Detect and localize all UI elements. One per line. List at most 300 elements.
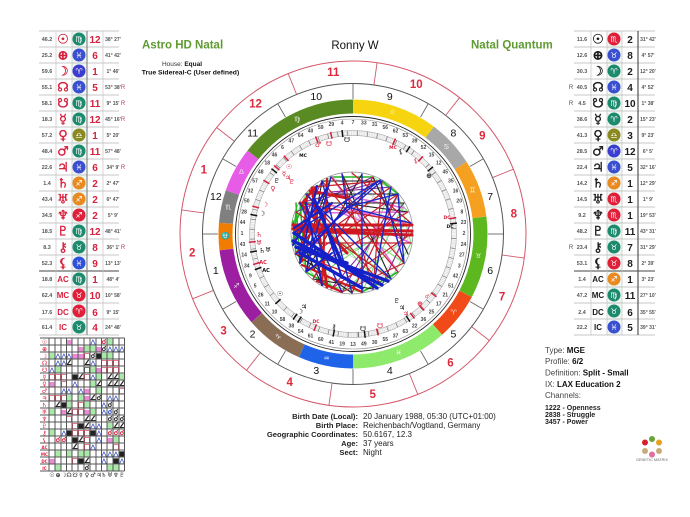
gate numbers: 24 — [461, 242, 466, 248]
aspect tints and marks: ■ — [96, 366, 102, 374]
red design activation ticks — [249, 132, 456, 335]
row: Earth: ♉ — [610, 51, 618, 60]
aspect tints and marks: △ — [49, 366, 55, 374]
quantum house numbers: 11 — [327, 67, 340, 79]
aspect tints and marks: ■■■ — [48, 351, 114, 360]
gate numbers: 63 — [403, 329, 408, 335]
aspect tints and marks: □□ — [72, 408, 84, 416]
gate numbers: 45 — [443, 169, 448, 175]
row: North Node — [42, 80, 126, 96]
row: Saturn — [43, 176, 119, 192]
aspect row labels: ⊕ — [42, 346, 47, 353]
text block: design summary: 2838 - Struggle — [545, 412, 595, 419]
gate numbers: 14 — [241, 253, 247, 259]
row: Uranus: 14.5 — [577, 197, 587, 203]
row: Mercury — [577, 112, 656, 128]
aspect tints and marks: □ — [84, 366, 90, 374]
row: Earth — [577, 48, 654, 64]
row: Pluto: 11 — [625, 227, 636, 238]
aspect tints and marks: ■■ — [54, 365, 97, 374]
planet activation labels: ☿ — [282, 170, 286, 178]
panel: aspect grid — [40, 337, 126, 479]
natal house numbers: 6 — [487, 265, 493, 277]
zodiac band glyphs: ♋ — [443, 143, 449, 151]
aspect column labels: ☉⊕☽☊☋☿♀♂♃♄♅♆♇ — [49, 472, 125, 479]
text block: birth details: Birth Date (Local): — [292, 412, 358, 421]
row: Mars: ♂ — [592, 144, 604, 160]
row: Mercury: 38.6 — [577, 117, 587, 123]
aspect row labels: ⚸ — [42, 437, 47, 444]
planet activation labels: ☋ — [344, 136, 350, 144]
aspect tints and marks: △△ — [55, 359, 67, 367]
natal house numbers: 4 — [387, 365, 393, 377]
aspect tints and marks: ☌☌ — [56, 436, 67, 444]
row: Earth: ♓ — [75, 51, 83, 60]
aspect tints and marks: △ — [96, 429, 102, 437]
row: Chiron: 23.4 — [577, 245, 587, 251]
gate numbers: 44 — [240, 220, 246, 226]
row: Venus: ♀ — [593, 128, 603, 144]
planet activation labels: ♂ — [315, 141, 321, 149]
row: Mars: ♈ — [610, 147, 618, 156]
heading: Natal Quantum: Natal Quantum — [471, 40, 553, 52]
row: Midheaven: 11 — [625, 291, 636, 302]
row: South Node: 4.5 — [578, 101, 586, 107]
row: Earth: 41° 42' — [105, 53, 121, 59]
row: Imum Coeli: IC — [594, 323, 602, 332]
row: Earth: 25.2 — [42, 53, 52, 59]
aspect row labels: ☿ — [43, 374, 46, 381]
row: Jupiter: 22.4 — [577, 165, 587, 171]
row: Sun — [577, 32, 656, 48]
aspect tints and marks: ☌ — [102, 338, 107, 346]
row: Jupiter: ♃ — [592, 160, 604, 176]
row: North Node: R — [569, 85, 574, 91]
row: Chiron — [569, 240, 656, 256]
aspect tints and marks: □ — [61, 380, 67, 388]
row: Saturn: 14.2 — [577, 181, 587, 187]
row: Midheaven — [42, 288, 121, 302]
gate numbers: 40 — [308, 128, 314, 134]
row: Lilith — [577, 256, 654, 272]
aspect tints and marks: ■ — [49, 457, 55, 465]
aspect tints and marks: △△△ — [107, 345, 125, 353]
planet activation labels: ♃ — [285, 174, 291, 182]
row: Chiron: 8 — [92, 243, 98, 254]
row: Mercury: 2 — [627, 115, 633, 126]
aspect row labels: ☽ — [42, 353, 47, 360]
gate numbers: 33 — [361, 121, 367, 127]
row: Uranus: 43.4 — [42, 197, 52, 203]
row: Saturn: ♐ — [610, 179, 618, 188]
text block: birth details: 20 January 1988, 05:30 (UTC+01:00) — [363, 412, 496, 421]
row: North Node: 53° 38' — [105, 85, 121, 91]
aspect tints and marks: □□□ — [101, 359, 119, 367]
row: Descendant: 2.4 — [578, 310, 586, 316]
gate numbers: 17 — [436, 301, 442, 307]
aspect tints and marks: □□□ — [101, 366, 119, 374]
row: Uranus: 6° 47' — [107, 197, 119, 203]
text block: birth details: Night — [363, 448, 382, 457]
gate numbers: 5 — [254, 283, 257, 289]
gate numbers: 2 — [463, 231, 466, 237]
row: South Node: ♍ — [610, 99, 618, 108]
text block: birth details: 37 years — [363, 439, 394, 448]
icon: Genetic Matrix logo: GENETIC MATRIX — [636, 458, 668, 462]
row: Mercury — [42, 112, 126, 128]
planet activation labels: ☽ — [297, 308, 303, 316]
row: North Node: ♓ — [75, 83, 83, 92]
planet activation labels: ♂ — [425, 294, 429, 300]
planet activation labels: ☉ — [286, 163, 292, 171]
row: Mercury: R — [121, 117, 126, 123]
aspect tints and marks: ☌ — [108, 401, 113, 409]
gate numbers: 15 — [429, 153, 434, 159]
row: Saturn — [577, 176, 656, 192]
row: Uranus: 1° 9' — [643, 197, 653, 203]
natal house numbers: 1 — [213, 265, 219, 277]
row: Chiron: R — [121, 245, 126, 251]
row: Lilith: ⚸ — [58, 256, 68, 272]
black personality activation ticks — [250, 130, 457, 338]
row: Lilith: 2° 39' — [642, 261, 654, 267]
row: North Node: R — [121, 85, 126, 91]
row: Earth: ⊕ — [58, 48, 68, 64]
chart: channel chords circle — [291, 172, 413, 294]
row: Mercury: 18.3 — [42, 117, 52, 123]
row: Saturn: ♄ — [592, 176, 604, 192]
row: Descendant: DC — [592, 308, 604, 317]
row: Imum Coeli: ♉ — [75, 323, 83, 332]
gate numbers: 3 — [458, 263, 461, 269]
row: Earth — [42, 48, 121, 64]
row: Moon: ☽ — [592, 64, 604, 80]
row: Uranus: ♐ — [75, 195, 83, 204]
aspect row labels: ♆ — [42, 416, 47, 423]
row: Imum Coeli: 4 — [92, 323, 98, 334]
row: Descendant: 17.6 — [42, 310, 52, 316]
row: Mercury: 45° 16' — [105, 117, 121, 123]
gate numbers: 61 — [308, 334, 314, 340]
quantum house numbers: 3 — [220, 325, 227, 337]
zodiac band glyphs: ♐ — [233, 282, 240, 290]
row: Venus — [42, 128, 119, 144]
planet activation labels: ♄ — [256, 231, 262, 239]
natal house numbers: 9 — [387, 91, 393, 103]
chords: light grey — [293, 173, 412, 292]
planet activation labels: ☋ — [377, 322, 383, 330]
text block: birth details: Geographic Coordinates: — [267, 430, 358, 439]
gate numbers: 19 — [339, 341, 345, 347]
aspect row labels: DC — [41, 459, 48, 464]
planet activation labels: ☽ — [262, 201, 268, 209]
row: Venus: ♎ — [610, 131, 618, 140]
planet activation labels: ♀ — [270, 185, 276, 193]
row: Chiron: 8.3 — [43, 245, 51, 251]
row: Uranus: 2 — [92, 195, 98, 206]
row: North Node: ☊ — [592, 80, 604, 96]
aspect tints and marks: □ — [84, 436, 90, 444]
row: South Node: ♍ — [75, 99, 83, 108]
row: Neptune: 34.5 — [42, 213, 52, 219]
gate numbers: 60 — [318, 337, 324, 343]
chords: light green — [293, 177, 412, 293]
planet activation labels: ♃ — [301, 303, 307, 311]
row: Saturn: 2° 47' — [107, 181, 119, 187]
aspect tints and marks: △ — [96, 436, 102, 444]
row: Sun: ♏ — [610, 35, 618, 44]
text block: house system — [142, 61, 239, 76]
aspect row labels: ☉ — [42, 339, 47, 346]
chords: pink and purple — [306, 177, 411, 272]
planet activation labels: ⊕ — [417, 300, 423, 308]
aspect tints and marks: ■■ — [61, 408, 90, 416]
gate numbers: 20 — [456, 199, 462, 205]
aspect tints and marks: △ — [90, 373, 96, 381]
text block: design summary: Profile: 6/2 — [545, 357, 584, 366]
aspect tints and marks: ■ — [95, 386, 103, 395]
gate numbers: 13 — [350, 342, 356, 348]
row: Neptune: ♆ — [57, 208, 69, 224]
text block: birth details: Birth Place: — [316, 421, 358, 430]
row: Earth: 4° 57' — [642, 53, 654, 59]
row: Chiron: ⚷ — [593, 240, 603, 256]
text block: design summary: Channels: — [545, 391, 581, 400]
row: Descendant: 35° 55' — [640, 310, 656, 316]
gate numbers: 18 — [264, 161, 270, 167]
aspect tints and marks: ■■ — [83, 344, 97, 353]
row: South Node: ☋ — [57, 96, 69, 112]
natal house numbers: 7 — [487, 191, 493, 203]
row: Midheaven: 62.4 — [42, 293, 52, 299]
row: Midheaven: ♍ — [610, 291, 618, 300]
aspect tints and marks: ■■■■ — [54, 449, 91, 458]
row: Lilith: 9 — [92, 259, 98, 270]
row: Mercury: 15° 23' — [640, 117, 656, 123]
aspect row labels: ☊ — [42, 360, 47, 367]
row: Pluto: 48° 41' — [105, 229, 121, 235]
text block: birth details: Reichenbach/Vogtland, Germany — [363, 421, 480, 430]
zodiac band glyphs: ♑ — [275, 333, 281, 341]
zodiac band glyphs: ♎ — [238, 168, 245, 176]
gate numbers: 4 — [341, 121, 344, 127]
row: Pluto: 18.5 — [42, 229, 52, 235]
row: South Node: 11 — [90, 99, 101, 110]
row: Descendant: 6 — [92, 308, 98, 319]
row: North Node: 4 — [627, 83, 633, 94]
gate numbers: 26 — [258, 293, 264, 299]
row: Lilith: ⚸ — [593, 256, 603, 272]
row: Chiron: 31° 29' — [640, 245, 656, 251]
row: Moon: 59.6 — [42, 69, 52, 75]
text block: house system: House: Equal — [162, 61, 202, 68]
aspect tints and marks: ☌ — [85, 464, 90, 472]
row: Sun: 46.2 — [42, 37, 52, 43]
planet activation labels: ⚸ — [413, 157, 419, 165]
row: Pluto: ♇ — [592, 224, 604, 240]
row: Descendant: ♉ — [610, 307, 618, 316]
planet activation labels: AC — [259, 260, 267, 266]
aspect tints and marks: ☌■ — [91, 352, 102, 360]
row: Mars: 28.5 — [577, 149, 587, 155]
gate numbers — [240, 120, 466, 348]
gate numbers: 10 — [272, 309, 278, 315]
gate numbers: 64 — [298, 133, 304, 139]
row: Mercury: ☿ — [594, 112, 602, 128]
row: Pluto: 12 — [89, 227, 101, 238]
natal house numbers: 3 — [313, 365, 319, 377]
row: Imum Coeli: 5 — [627, 323, 633, 334]
row: Uranus — [42, 192, 119, 208]
row: North Node: 40.5 — [577, 85, 587, 91]
aspect tints and marks: ■■ — [48, 407, 97, 416]
row: Saturn: 1.4 — [43, 181, 51, 187]
aspect tints and marks: ■■ — [78, 345, 102, 353]
row: Moon: ♈ — [610, 67, 618, 76]
gate numbers: 7 — [352, 120, 355, 126]
natal house numbers: 5 — [450, 328, 456, 340]
aspect tints and marks: □ — [84, 443, 90, 451]
quantum house numbers: 5 — [370, 389, 377, 401]
gate numbers: 42 — [453, 273, 459, 279]
natal house numbers — [210, 91, 493, 377]
planet activation labels: ♅ — [256, 239, 262, 247]
row: South Node — [42, 96, 126, 112]
planet activation labels: ☽ — [259, 210, 265, 218]
row: Mercury: ♈ — [610, 115, 618, 124]
coloured zodiac band — [173, 54, 533, 414]
gate numbers: 11 — [265, 301, 270, 307]
aspect tints and marks: ■ — [107, 436, 113, 444]
gate numbers: 62 — [393, 128, 398, 134]
zodiac band glyphs: ♈ — [450, 308, 457, 316]
text block: design summary: 1222 - Openness — [545, 405, 601, 412]
row: North Node: ☊ — [57, 80, 69, 96]
gate numbers: 22 — [412, 323, 418, 329]
aspect tints and marks: ■ — [113, 457, 119, 465]
aspect tints and marks: ■■ — [65, 393, 85, 402]
row: Midheaven: 10 — [89, 291, 101, 302]
planet activation labels: MC — [299, 153, 308, 159]
gate ring circles and ticks — [236, 116, 470, 352]
gate numbers: 8 — [460, 209, 463, 215]
row: Lilith: 52.3 — [42, 261, 52, 267]
gate numbers: 56 — [382, 125, 388, 131]
row: Mars: 6° 5' — [643, 149, 653, 155]
row: North Node: 4° 52' — [642, 85, 654, 91]
gate numbers: 31 — [372, 122, 378, 128]
row: Moon — [577, 64, 656, 80]
natal house numbers: 8 — [450, 128, 456, 140]
aspect tints and marks: ■■■ — [54, 463, 120, 472]
row: Ascendant — [42, 272, 119, 286]
aspect row labels: ♀ — [42, 381, 47, 388]
row: Moon: 2 — [627, 67, 633, 78]
row: Pluto: ♇ — [57, 224, 69, 240]
row: Moon: 30.3 — [577, 69, 587, 75]
aspect row labels: ♇ — [42, 423, 47, 430]
row: Moon — [42, 64, 119, 80]
planet activation labels: ☉ — [277, 290, 283, 298]
planet activation labels: ⚷ — [331, 323, 337, 331]
row: Chiron: 7 — [627, 243, 633, 254]
quantum house numbers: 7 — [499, 291, 505, 303]
aspect tints and marks: ∠∠∠∠ — [96, 380, 125, 388]
gate numbers: 59 — [318, 125, 324, 131]
natal house numbers: 10 — [310, 91, 322, 103]
row: Sun: ☉ — [57, 32, 69, 48]
planet activation labels: ♇ — [274, 177, 280, 185]
row: Earth: 12.6 — [577, 53, 587, 59]
aspect tints and marks: □□□ — [72, 429, 90, 437]
row: Moon: ☽ — [57, 64, 69, 80]
row: Mars — [42, 144, 121, 160]
planet activation labels: DC — [443, 215, 451, 221]
row: Midheaven: ♉ — [75, 291, 83, 300]
row: Sun: 11.6 — [577, 37, 587, 43]
quantum house numbers: 9 — [479, 131, 486, 143]
aspect tints and marks: ■■ — [66, 429, 96, 437]
row: Ascendant: 1.4 — [578, 277, 586, 283]
row: Mars: ♂ — [57, 144, 69, 160]
row: Imum Coeli: 61.4 — [42, 325, 52, 331]
aspect tints and marks: △△ — [107, 394, 119, 402]
row: Jupiter: 34° 9' — [107, 165, 119, 171]
gate numbers: 55 — [382, 337, 388, 343]
row: Sun: 38° 27' — [105, 37, 121, 43]
row: Imum Coeli: 39° 31' — [640, 325, 656, 331]
row: Pluto: ♍ — [610, 227, 618, 236]
gate numbers: 6 — [281, 145, 284, 151]
zodiac band glyphs: ♏ — [225, 203, 232, 211]
gate numbers: 30 — [372, 340, 378, 346]
gate numbers: 29 — [329, 122, 334, 128]
gate numbers: 12 — [436, 161, 442, 167]
row: North Node — [569, 80, 654, 96]
row: South Node: ☋ — [592, 96, 604, 112]
zodiac band glyphs: ♌ — [389, 109, 396, 117]
aspect tints and marks: □ — [72, 422, 78, 430]
row: Descendant — [42, 304, 119, 319]
row: Moon: 1° 46' — [107, 69, 119, 75]
row: Saturn: 2 — [92, 179, 98, 190]
row: Neptune: 1 — [627, 211, 633, 222]
quantum house numbers: 6 — [447, 357, 454, 369]
row: Neptune: ♐ — [75, 211, 83, 220]
row: Descendant: 6 — [627, 308, 633, 319]
row: Chiron: 36° 1' — [107, 245, 119, 251]
row: Mercury: 12 — [89, 115, 101, 126]
row: Uranus — [577, 192, 653, 208]
gate numbers: 21 — [443, 293, 448, 299]
gate numbers: 43 — [240, 242, 246, 248]
gate numbers: 23 — [461, 220, 466, 226]
aspect tints and marks: ■ — [48, 428, 56, 437]
row: Imum Coeli — [577, 320, 656, 334]
quantum house numbers: 1 — [201, 165, 208, 177]
gate numbers: 53 — [403, 133, 408, 139]
chords: thick blue band — [293, 199, 388, 288]
gate numbers: 41 — [329, 340, 334, 346]
gate numbers: 52 — [421, 145, 426, 151]
row: Saturn: 1 — [627, 179, 633, 190]
aspect tints and marks: □ — [66, 415, 72, 423]
aspect tints and marks: ■ — [84, 394, 90, 402]
gate numbers: 38 — [289, 323, 294, 329]
aspect tints and marks: ∠ — [72, 443, 78, 451]
gate numbers: 36 — [421, 317, 426, 323]
row: Jupiter: 32° 16' — [640, 165, 656, 171]
